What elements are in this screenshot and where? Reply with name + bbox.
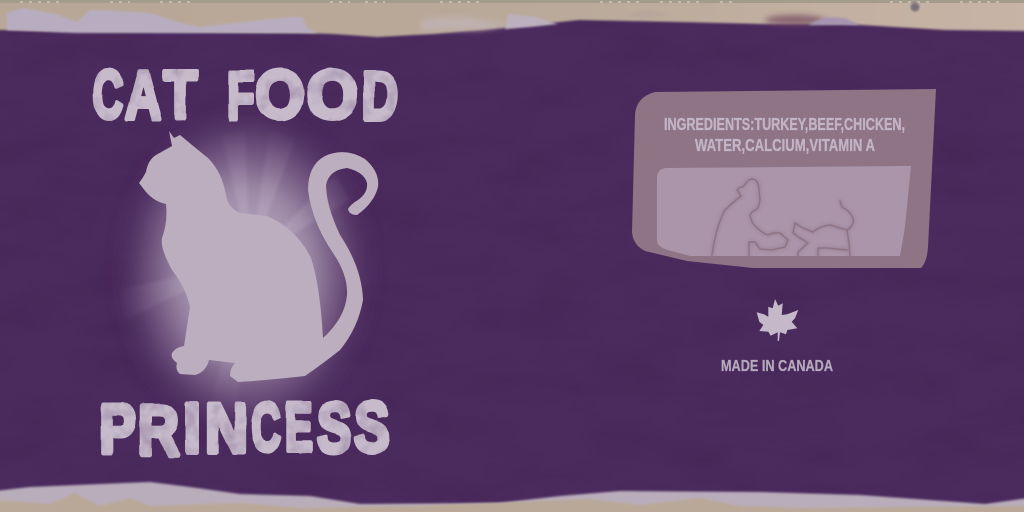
ingredients text (664, 114, 905, 155)
title: CAT FOOD: D (362, 58, 398, 134)
panel background (632, 89, 936, 268)
title: CAT FOOD: A (125, 58, 161, 134)
glow behind cat (113, 102, 377, 445)
cat silhouette (139, 131, 378, 382)
title: CAT FOOD: O (307, 57, 358, 133)
title: CAT FOOD (93, 57, 398, 134)
title: PRINCESS: P (100, 390, 136, 468)
title: CAT FOOD: C (93, 57, 123, 133)
title: PRINCESS (100, 388, 390, 469)
illustration: person feeding cat (712, 179, 853, 256)
light rays (120, 130, 350, 445)
title: CAT FOOD: F (227, 58, 254, 134)
title: PRINCESS: I (183, 389, 201, 467)
title: PRINCESS: E (285, 388, 313, 466)
panel: ingredients (632, 89, 936, 268)
ingredients text: WATER,CALCIUM,VITAMIN A (695, 135, 875, 155)
made in canada: MADE IN CANADA (721, 358, 833, 375)
illustration window (657, 166, 911, 256)
title: PRINCESS: N (205, 389, 248, 467)
ingredients text: INGREDIENTS:TURKEY,BEEF,CHICKEN, (664, 114, 905, 134)
title: PRINCESS: R (138, 391, 179, 469)
title: CAT FOOD: O (255, 57, 305, 133)
torn paper strip: top (0, 0, 1024, 37)
title: CAT FOOD: T (164, 57, 197, 133)
title: PRINCESS: S (317, 389, 351, 467)
title: PRINCESS: C (251, 388, 281, 466)
icon: maple leaf (757, 299, 798, 341)
title: PRINCESS: S (354, 388, 390, 466)
torn paper strip: bottom (0, 482, 1024, 512)
